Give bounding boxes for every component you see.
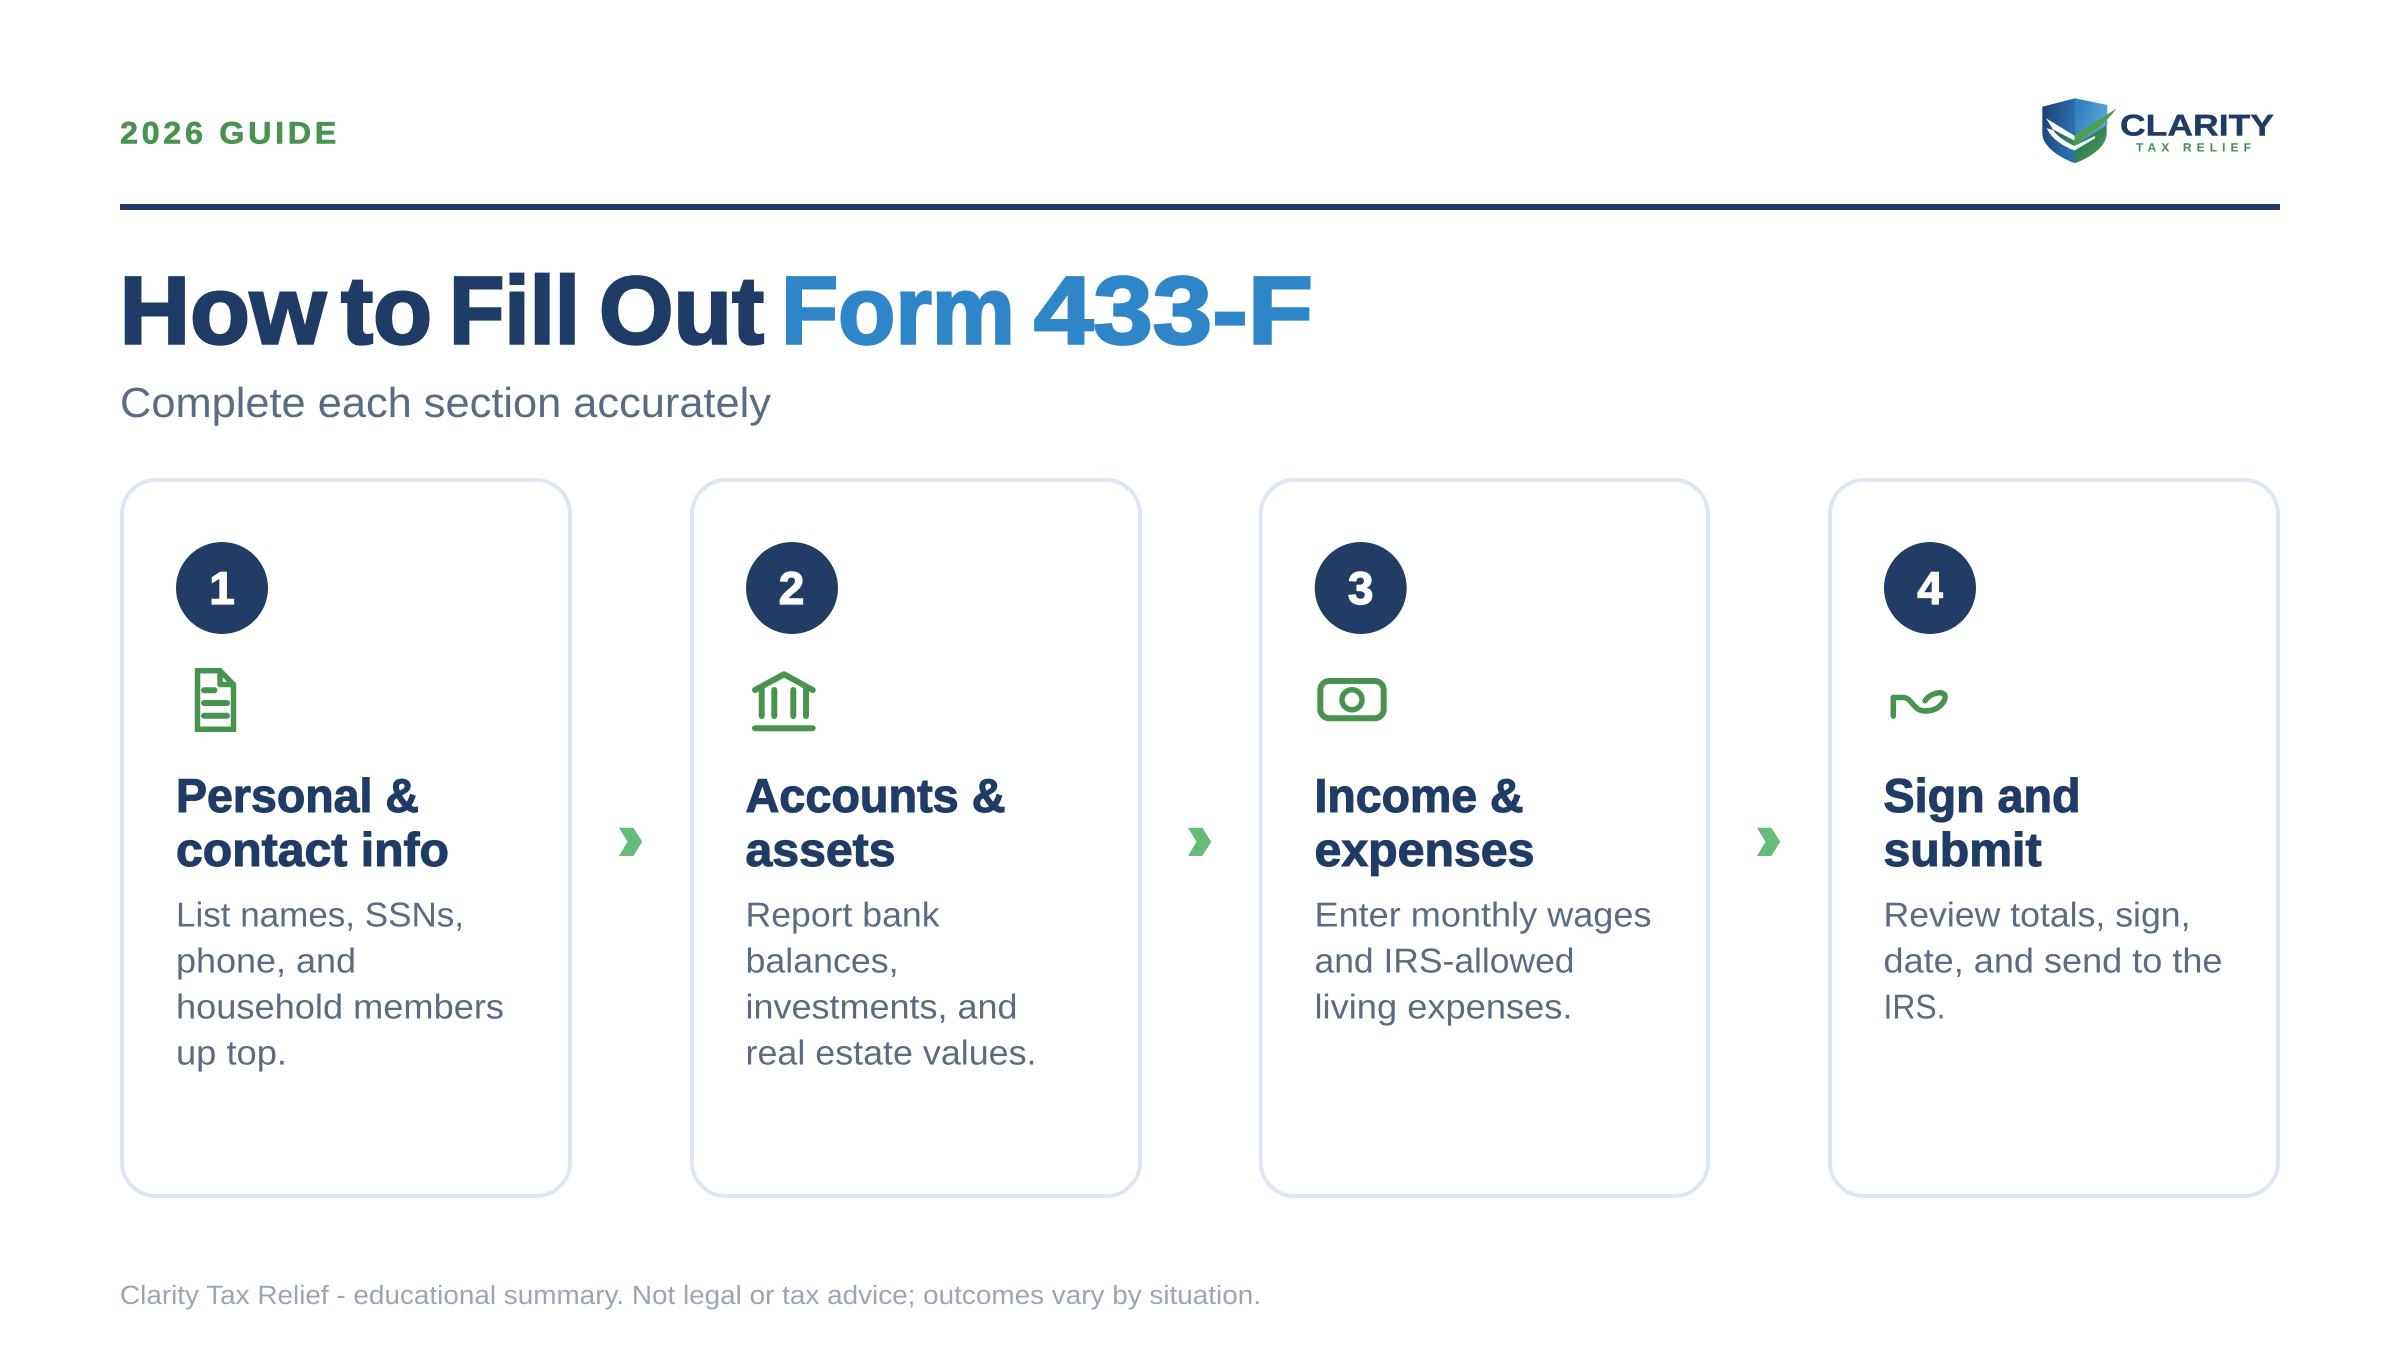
- description: living expenses.: [1314, 988, 1572, 1026]
- panel: step 1: [122, 480, 570, 1196]
- step number 1: [176, 542, 268, 634]
- step number 2: 2: [779, 562, 804, 614]
- step number 4: [1884, 542, 1976, 634]
- description: [746, 896, 1036, 1072]
- arrow 2 to 3: [1188, 828, 1211, 856]
- heading: [1314, 770, 1534, 877]
- logo: Clarity Tax Relief: [2042, 98, 2274, 163]
- heading: assets: [746, 824, 896, 877]
- icon: money: [1320, 681, 1384, 718]
- title: Out: [599, 258, 764, 364]
- description: and IRS-allowed: [1314, 942, 1574, 980]
- step number 4: 4: [1917, 562, 1943, 614]
- title: 433-F: [1034, 258, 1313, 364]
- heading: [176, 770, 449, 877]
- description: [1884, 896, 2222, 1026]
- description: balances,: [746, 942, 898, 980]
- icon: document: [198, 671, 234, 729]
- description: [1314, 896, 1652, 1026]
- logo: Clarity Tax Relief: CLARITY: [2120, 110, 2274, 143]
- description: up top.: [176, 1034, 287, 1072]
- description: [176, 896, 504, 1072]
- heading: contact info: [176, 824, 449, 877]
- icon: signature: [1893, 693, 1945, 716]
- description: phone, and: [176, 942, 356, 980]
- title: [120, 258, 1313, 364]
- description: List names, SSNs,: [176, 896, 464, 934]
- arrow 3 to 4: [1757, 828, 1780, 856]
- panel: step 3: [1261, 480, 1708, 1196]
- description: real estate values.: [746, 1034, 1036, 1072]
- description: investments, and: [746, 988, 1018, 1026]
- step number 2: [746, 542, 838, 634]
- panel: step 4: [1830, 480, 2278, 1196]
- icon: bank: [755, 674, 813, 728]
- title: How: [120, 258, 326, 364]
- step number 1: 1: [209, 562, 235, 614]
- header rule: [120, 204, 2280, 210]
- heading: Sign and: [1884, 770, 2080, 823]
- description: date, and send to the: [1884, 942, 2222, 980]
- footer disclaimer: Clarity Tax Relief - educational summary. Not legal or tax advice; outcomes vary by situation.: [120, 1280, 1261, 1310]
- eyebrow label: 2026 GUIDE: [120, 116, 340, 150]
- step number 3: [1315, 542, 1407, 634]
- title: Fill: [449, 258, 580, 364]
- description: Report bank: [746, 896, 940, 934]
- heading: expenses: [1314, 824, 1534, 877]
- description: Review totals, sign,: [1884, 896, 2190, 934]
- heading: Accounts &: [746, 770, 1006, 823]
- description: household members: [176, 988, 504, 1026]
- panel: step 2: [692, 480, 1140, 1196]
- description: Enter monthly wages: [1314, 896, 1652, 934]
- heading: submit: [1884, 824, 2042, 877]
- description: IRS.: [1884, 988, 1946, 1026]
- arrow 1 to 2: [619, 828, 642, 856]
- heading: Personal &: [176, 770, 419, 823]
- title: Form: [781, 258, 1015, 364]
- logo: Clarity Tax Relief: TAX RELIEF: [2136, 141, 2251, 155]
- step number 3: 3: [1348, 562, 1373, 614]
- heading: Income &: [1314, 770, 1524, 823]
- heading: [746, 770, 1006, 877]
- title: to: [341, 258, 432, 364]
- subtitle: Complete each section accurately: [120, 379, 771, 426]
- heading: [1884, 770, 2080, 877]
